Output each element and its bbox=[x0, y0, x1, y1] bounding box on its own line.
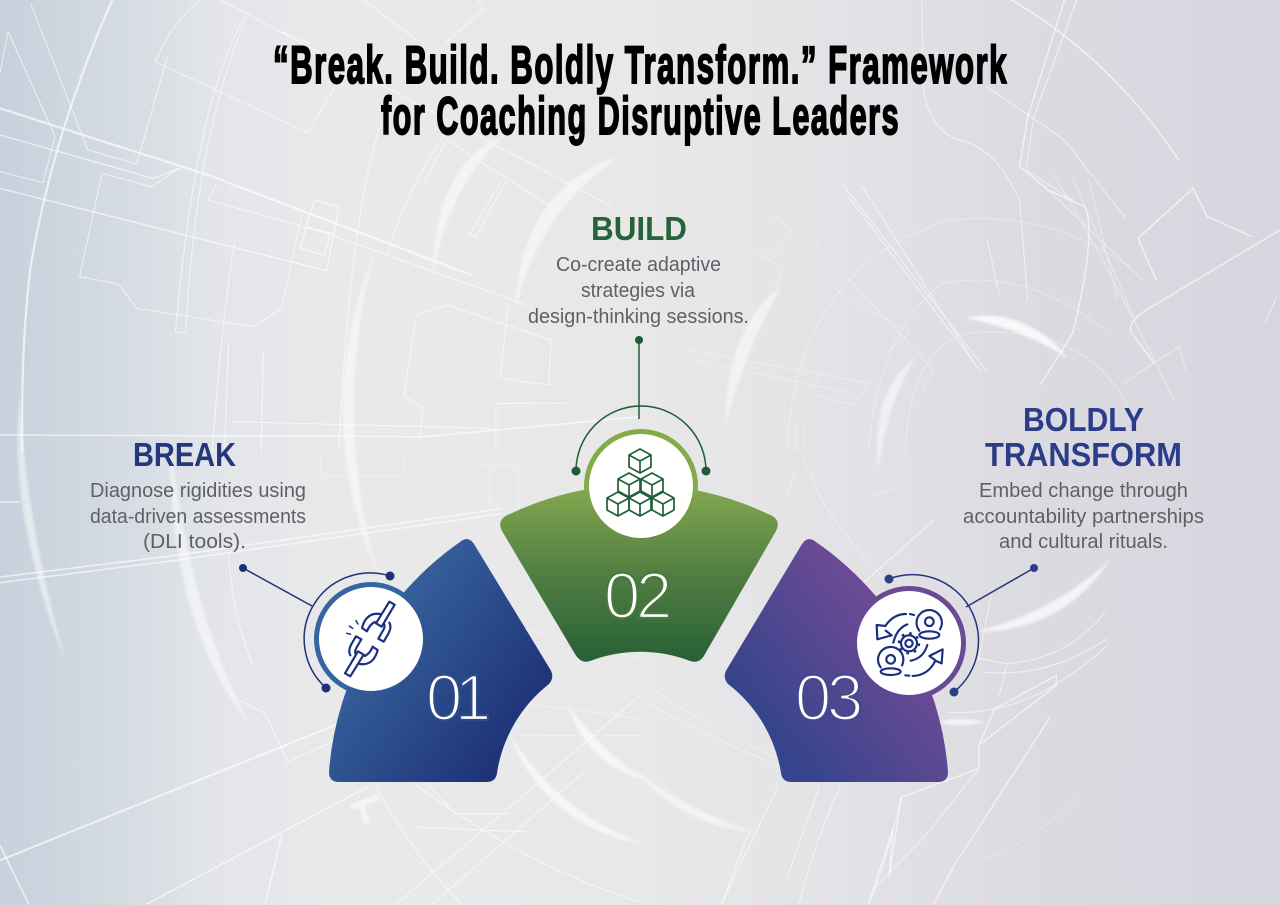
panel: boldly transform text bbox=[963, 401, 1204, 553]
segment: purple bbox=[725, 539, 948, 782]
panel: build text bbox=[528, 210, 749, 328]
text: build description: design-thinking sessions. bbox=[528, 306, 749, 328]
heading: break: BREAK bbox=[133, 436, 236, 473]
text: break description: Diagnose rigidities using bbox=[90, 480, 306, 502]
connector: boldly transform bbox=[884, 564, 1038, 696]
panel: step 02 bbox=[500, 336, 778, 662]
icon: broken chain bbox=[319, 587, 423, 691]
text: break description: data-driven assessments bbox=[90, 506, 306, 528]
background glow arcs bbox=[18, 135, 1110, 845]
heading: boldly transform: TRANSFORM bbox=[985, 436, 1182, 473]
panel: step 03 bbox=[725, 539, 1038, 782]
text: boldly transform description: accountability partnerships bbox=[963, 506, 1204, 528]
text: break description bbox=[90, 480, 306, 553]
segment: green bbox=[500, 485, 778, 662]
text: boldly transform description bbox=[963, 480, 1204, 553]
title bbox=[273, 36, 1008, 146]
panel: break text bbox=[90, 436, 306, 553]
text: boldly transform description: Embed change through bbox=[979, 480, 1188, 502]
icon: stacked cubes bbox=[589, 434, 693, 538]
text: break description: (DLI tools). bbox=[143, 531, 246, 553]
title: for Coaching Disruptive Leaders bbox=[381, 87, 900, 146]
icon: people, gear and cycle arrows bbox=[857, 591, 961, 695]
segment: blue bbox=[329, 539, 552, 782]
text: build description: Co-create adaptive bbox=[556, 254, 721, 276]
number: 01: 01 bbox=[426, 661, 491, 734]
text: build description: strategies via bbox=[581, 280, 696, 302]
text: boldly transform description: and cultural rituals. bbox=[999, 531, 1168, 553]
number: 02: 02 bbox=[604, 559, 672, 632]
number: 03: 03 bbox=[795, 661, 863, 734]
heading: boldly transform bbox=[985, 401, 1182, 473]
heading: boldly transform: BOLDLY bbox=[1023, 401, 1144, 438]
panel: step 01 bbox=[239, 539, 552, 782]
connector: break bbox=[239, 564, 394, 692]
connector: build bbox=[572, 336, 710, 476]
heading: build: BUILD bbox=[591, 210, 687, 247]
text: build description bbox=[528, 254, 749, 328]
